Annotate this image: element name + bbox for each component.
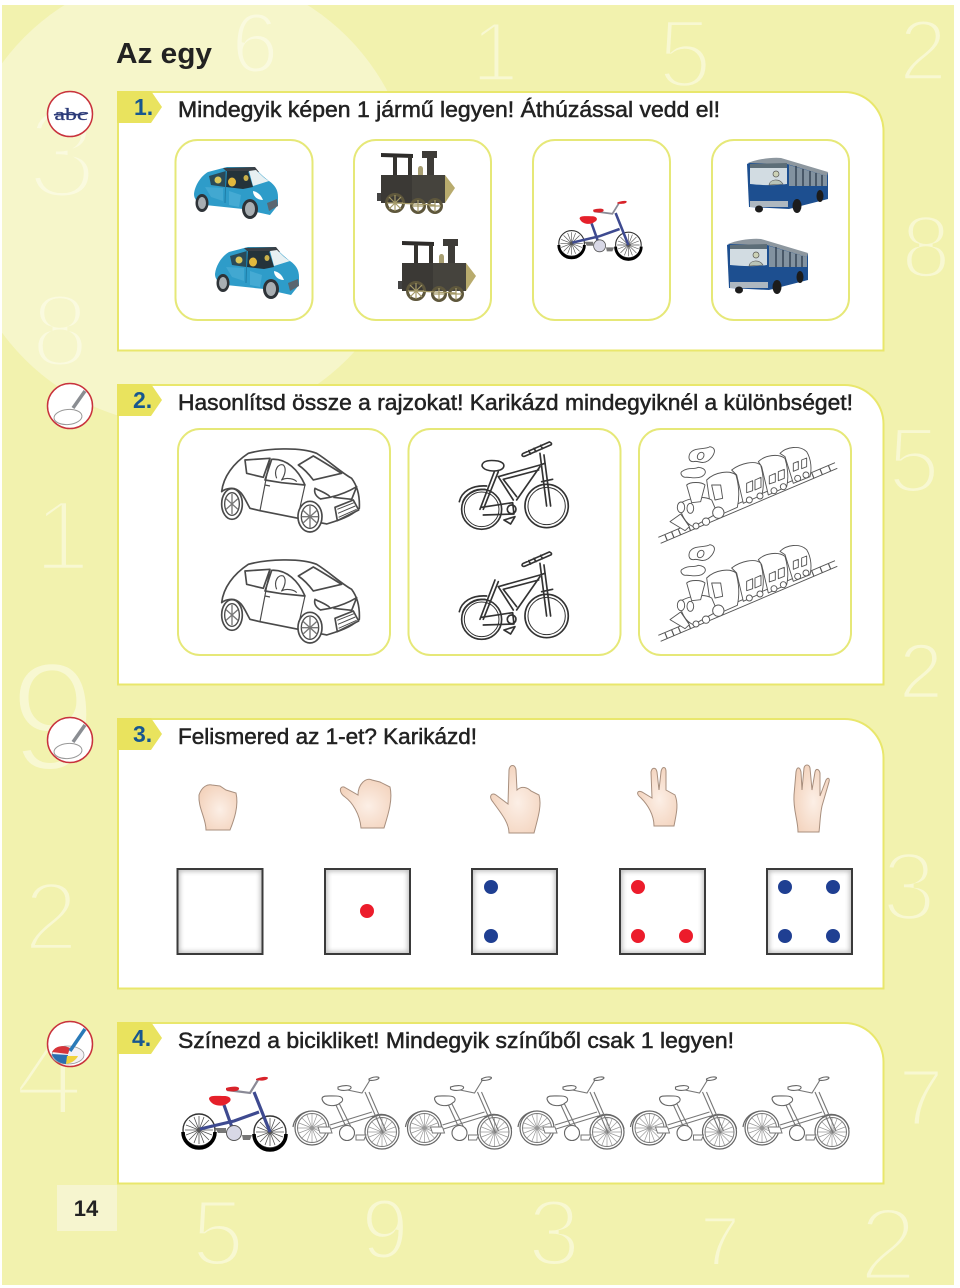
card: line drawn cars <box>178 429 390 655</box>
hand: fist <box>199 785 237 830</box>
instruction 2: Hasonlítsd össze a rajzokat! Karikázd mindegyiknél a különbséget! <box>178 390 853 415</box>
instruction 3: Felismered az 1-et? Karikázd! <box>178 724 477 749</box>
background numerals: 3 <box>882 832 936 941</box>
background numerals: 5 <box>192 1180 244 1285</box>
tab: number 4 <box>117 1022 162 1054</box>
icon: crossed out letters: abc <box>54 105 88 124</box>
background numerals: 4 <box>14 1003 84 1142</box>
tab: number 1: 1. <box>134 94 153 120</box>
tab: number 4: 4. <box>132 1025 151 1051</box>
hands row <box>199 765 829 833</box>
background numerals: 2 <box>24 862 78 971</box>
square: 0 dots <box>178 869 262 954</box>
background numerals: 5 <box>658 0 712 108</box>
card: one bicycle <box>533 140 670 320</box>
background numerals: 8 <box>902 197 950 296</box>
bicycle: outline 5 <box>743 1077 849 1149</box>
icon: magnifier pencil 3 <box>48 718 92 762</box>
icon: crossed out letters <box>48 92 92 136</box>
square: 2 dots <box>472 869 557 954</box>
die squares <box>178 869 852 954</box>
background numerals: 7 <box>899 1053 943 1142</box>
hand: thumb up <box>340 779 391 828</box>
tab: number 3: 3. <box>133 721 152 747</box>
instruction 1: Mindegyik képen 1 jármű legyen! Áthúzással vedd el! <box>178 97 720 122</box>
background numerals: 9 <box>362 1182 408 1276</box>
background numerals: 8 <box>31 273 89 388</box>
background numerals: 3 <box>528 1180 580 1285</box>
bicycle: coloured <box>183 1077 286 1150</box>
tab: number 2: 2. <box>133 387 152 413</box>
hand: one finger <box>491 766 540 833</box>
hand: two fingers <box>638 768 677 826</box>
square: 1 dot <box>325 869 410 954</box>
icon: paint palette <box>48 1022 92 1066</box>
bicycle seat on upper bike <box>482 461 504 471</box>
panel: exercise 3 <box>117 718 884 988</box>
bicycle: outline 3 <box>518 1077 624 1149</box>
hand: four fingers <box>794 765 829 832</box>
bicycle: outline 1 <box>293 1077 399 1149</box>
background numerals: 7 <box>701 1202 739 1280</box>
background numerals: 2 <box>899 3 947 99</box>
icon: magnifier pencil 2 <box>48 384 92 428</box>
page number: 14 <box>74 1196 99 1221</box>
card: line drawn trains <box>639 429 851 655</box>
square: 4 dots <box>767 869 852 954</box>
tab: number 2 <box>117 384 162 416</box>
page number <box>57 1185 117 1231</box>
card: two locomotives <box>354 140 491 320</box>
bicycle: outline 2 <box>406 1077 512 1149</box>
bicycle: outline 4 <box>630 1077 736 1149</box>
background numerals: 1 <box>472 5 518 99</box>
card: line drawn bicycles <box>408 429 620 655</box>
panel: exercise 1 <box>117 91 884 350</box>
card: two buses <box>712 140 849 320</box>
panel: exercise 4 <box>117 1022 884 1184</box>
instruction 4: Színezd a bicikliket! Mindegyik színűből csak 1 legyen! <box>178 1028 734 1053</box>
light background circle <box>2 5 388 415</box>
card: two cars <box>176 140 312 320</box>
background numerals: 3 <box>26 83 98 226</box>
tab: number 1 <box>117 91 162 123</box>
background numerals: 2 <box>899 627 943 715</box>
background numerals: 5 <box>888 408 940 512</box>
square: 3 dots <box>620 869 705 954</box>
tab: number 3 <box>117 718 162 750</box>
background numerals: 1 <box>34 480 90 592</box>
bicycles row <box>183 1077 849 1150</box>
title: Az egy <box>116 38 212 70</box>
background numerals: 9 <box>10 630 96 803</box>
panel: exercise 2 <box>117 384 884 684</box>
